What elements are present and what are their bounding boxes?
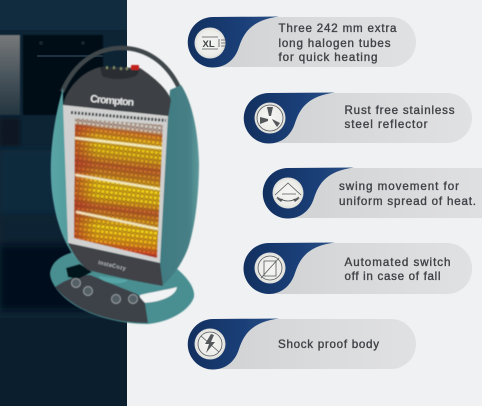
caption: Automated switch — [344, 256, 450, 269]
feature: automatic switch off — [244, 242, 472, 294]
navy swoosh — [188, 16, 279, 68]
caption: long halogen tubes — [278, 37, 391, 50]
caption: off in case of fall — [344, 270, 440, 283]
navy swoosh — [244, 242, 335, 294]
dark room photo backdrop — [0, 0, 127, 406]
caption: steel reflector — [344, 118, 428, 131]
feature: halogen tubes — [188, 16, 416, 68]
caption: swing movement for — [339, 180, 459, 193]
feature: swing movement — [263, 168, 482, 218]
feature: shock proof — [188, 318, 416, 370]
control buttons — [72, 278, 138, 304]
icon: no shock — [194, 328, 226, 360]
feature: stainless reflector — [244, 92, 472, 144]
caption — [344, 256, 450, 283]
pill background — [263, 168, 482, 218]
heater lower panel — [68, 243, 163, 286]
caption — [344, 104, 455, 131]
heater illustration — [50, 48, 199, 324]
heating grille with halogen tubes — [74, 118, 164, 258]
heater carry handle — [62, 48, 181, 92]
brand name: Crompton — [90, 93, 135, 109]
icon: XL tube — [194, 28, 226, 58]
halogen tube glow lines — [75, 138, 161, 229]
caption — [278, 22, 397, 64]
navy swoosh — [188, 318, 279, 370]
pill background — [188, 319, 416, 369]
icon: XL tube: XL — [202, 39, 215, 50]
icon: tilt off — [254, 252, 286, 284]
heater stem — [98, 276, 128, 283]
heater base control panel — [55, 264, 148, 323]
navy swoosh — [263, 168, 354, 218]
heater lower panel: InstaCozy — [98, 260, 126, 272]
caption: Shock proof body — [278, 338, 379, 351]
heater white frame — [63, 105, 168, 263]
icon: rust free fan — [254, 102, 286, 134]
heater top head — [63, 65, 171, 118]
caption: Three 242 mm extra — [278, 22, 397, 35]
icon: swing arc — [272, 178, 304, 208]
pill background — [244, 93, 472, 143]
heater teal body — [51, 85, 199, 285]
caption: uniform spread of heat. — [339, 195, 476, 208]
navy swoosh — [244, 92, 335, 144]
heater base ring — [50, 250, 194, 324]
caption: for quick heating — [278, 51, 378, 64]
caption: Rust free stainless — [344, 104, 455, 117]
caption — [339, 180, 476, 208]
heater reflector teeth — [71, 112, 166, 120]
pill background — [188, 17, 416, 67]
pill background — [244, 243, 472, 294]
